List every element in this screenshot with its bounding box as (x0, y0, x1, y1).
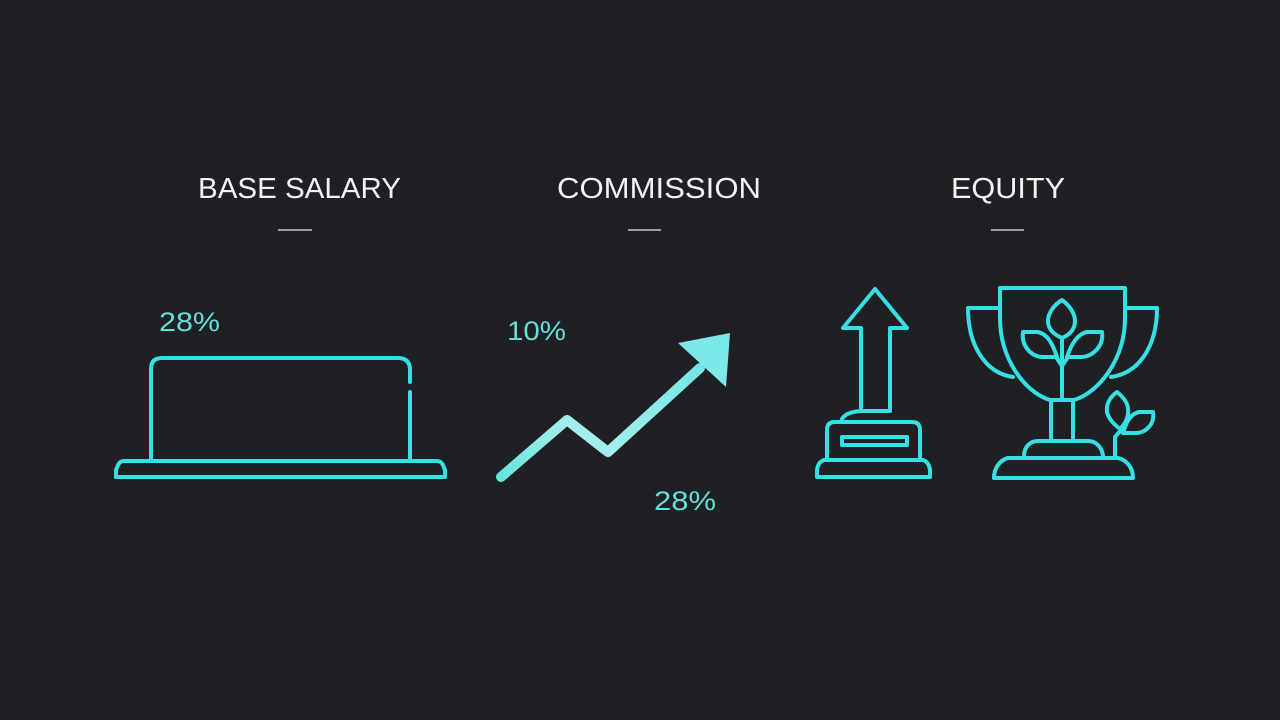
heading: equity: EQUITY (951, 173, 1065, 205)
icon: trophy with plant (968, 288, 1157, 478)
panel: equity (817, 173, 1157, 478)
heading: equity (951, 173, 1065, 230)
panel: base salary (116, 173, 445, 477)
label: base salary percentage: 28% (159, 307, 220, 337)
icon: arrow on podium (817, 289, 930, 477)
label: commission low percentage: 10% (507, 316, 566, 346)
icon: laptop outline (116, 358, 445, 477)
icon: rising arrow (501, 333, 730, 477)
heading: commission: COMMISSION (557, 173, 761, 205)
panel: commission (501, 173, 761, 516)
label: commission high percentage: 28% (654, 486, 716, 516)
heading: base salary: BASE SALARY (198, 173, 401, 205)
